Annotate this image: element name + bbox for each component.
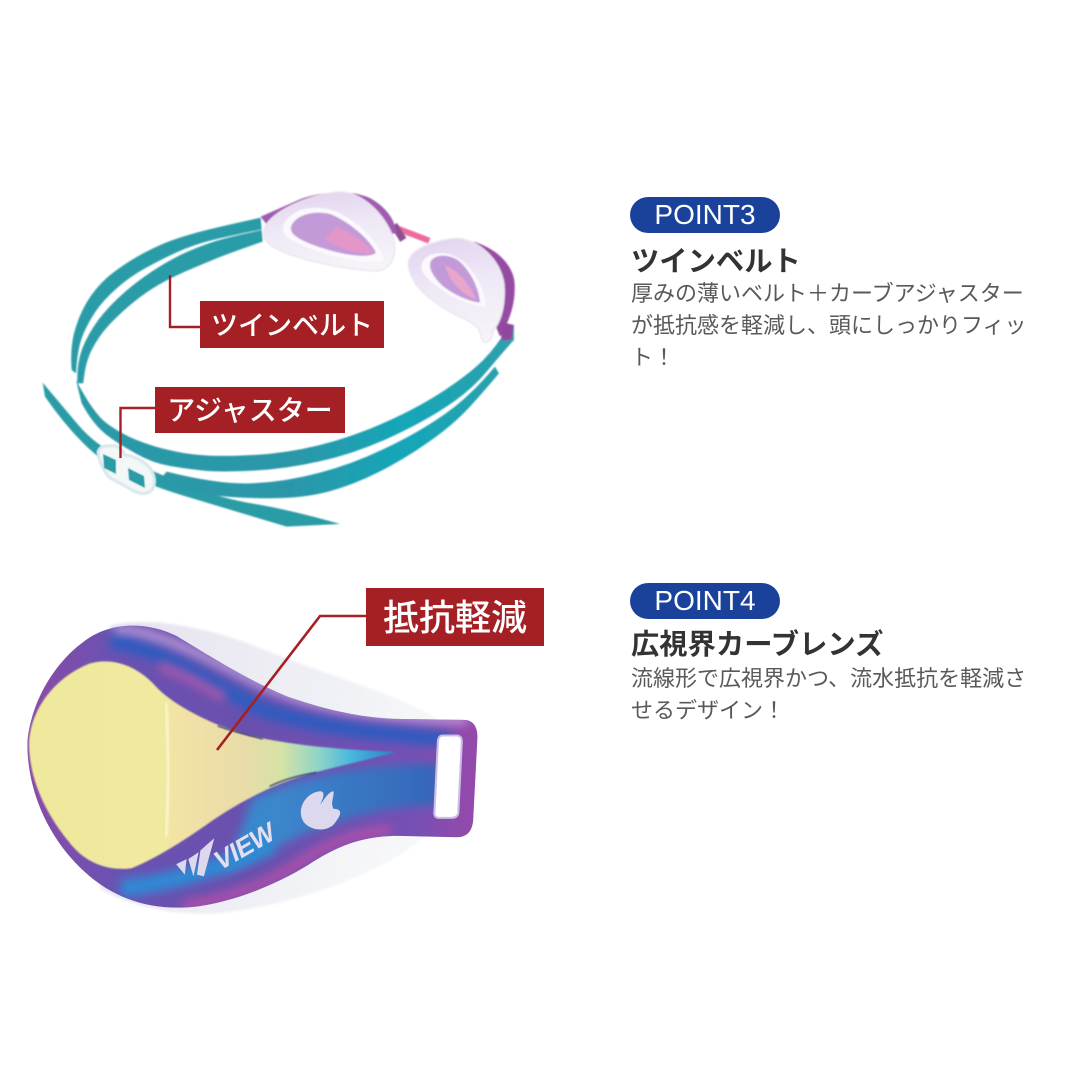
text block: twin belt description: ト！: [631, 345, 675, 370]
callout: adjuster: [120, 387, 345, 458]
badge: POINT4: POINT4: [654, 585, 756, 616]
callout: drag reduction: [217, 588, 544, 750]
nose bridge: [393, 227, 429, 241]
text block: lens description: せるデザイン！: [631, 698, 785, 723]
badge: POINT4: [630, 583, 780, 619]
panel: point 3: [630, 197, 1027, 370]
clear outer shell: [100, 622, 438, 913]
lens highlight line: [166, 703, 168, 837]
badge: POINT3: [630, 197, 780, 233]
brand mark: logo: [301, 791, 340, 830]
panel: point 4: [630, 583, 1026, 723]
callout: twin belt: [170, 275, 384, 348]
strap: loose belt end: [43, 383, 340, 527]
iridescent frame: [20, 615, 484, 916]
icon: clear adjuster buckle: [98, 446, 155, 494]
callout: drag reduction: 抵抗軽減: [383, 597, 527, 638]
right eyepiece: [408, 238, 515, 342]
brand mark: VIEW: [176, 816, 282, 876]
heading: wide-view curved lens: 広視界カーブレンズ: [631, 628, 883, 660]
text block: twin belt description: が抵抗感を軽減し、頭にしっかりフィッ: [631, 313, 1027, 338]
strap: upper inner belt: [77, 230, 263, 383]
callout: twin belt: ツインベルト: [211, 311, 373, 341]
brand mark: VIEW: VIEW: [208, 816, 282, 876]
badge: POINT3: POINT3: [654, 199, 756, 230]
text block: lens description: 流線形で広視界かつ、流水抵抗を軽減さ: [631, 666, 1026, 691]
text block: twin belt description: [631, 281, 1027, 370]
heading: twin belt: ツインベルト: [631, 245, 801, 277]
left eyepiece: [261, 192, 397, 271]
callout: adjuster: アジャスター: [167, 395, 333, 426]
strap: lower outer belt: [157, 367, 499, 498]
text block: twin belt description: 厚みの薄いベルト＋カーブアジャスター: [631, 281, 1024, 306]
lens rim shadows: [218, 726, 316, 786]
mirrored lens: [29, 661, 398, 869]
illustration: curved lens close-up: [20, 615, 484, 916]
illustration: goggles with twin belt: [43, 192, 515, 527]
strap slot: [434, 735, 462, 818]
strap: lower inner belt: [76, 327, 514, 471]
text block: lens description: [631, 666, 1026, 723]
strap: upper outer belt: [71, 218, 262, 373]
